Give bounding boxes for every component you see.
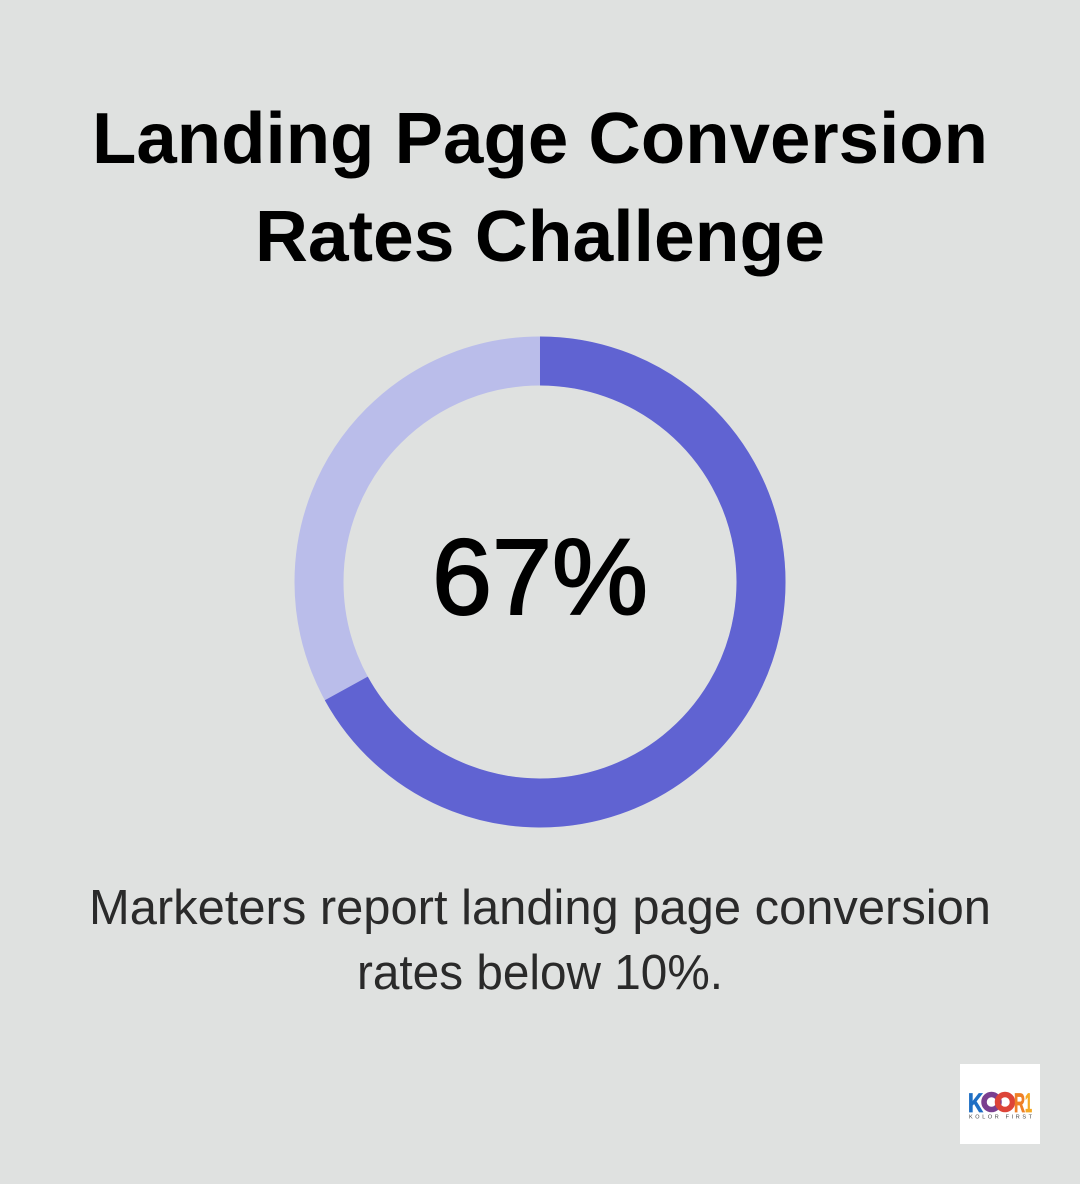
description text (89, 881, 991, 1000)
logo: Koori: R (1014, 1088, 1025, 1118)
donut chart: 67% (319, 361, 761, 803)
title: Landing Page Conversion (92, 99, 988, 179)
logo: Koori (960, 1064, 1040, 1144)
title: Rates Challenge (255, 197, 825, 277)
description text: Marketers report landing page conversion (89, 881, 991, 935)
logo: Koori: K (968, 1088, 983, 1118)
description text: rates below 10%. (357, 946, 723, 1000)
donut value: 67% (432, 516, 648, 637)
logo: Koori: KOLOR FIRST (969, 1114, 1033, 1120)
title (92, 99, 988, 277)
logo: Koori: 1 (1025, 1088, 1032, 1118)
